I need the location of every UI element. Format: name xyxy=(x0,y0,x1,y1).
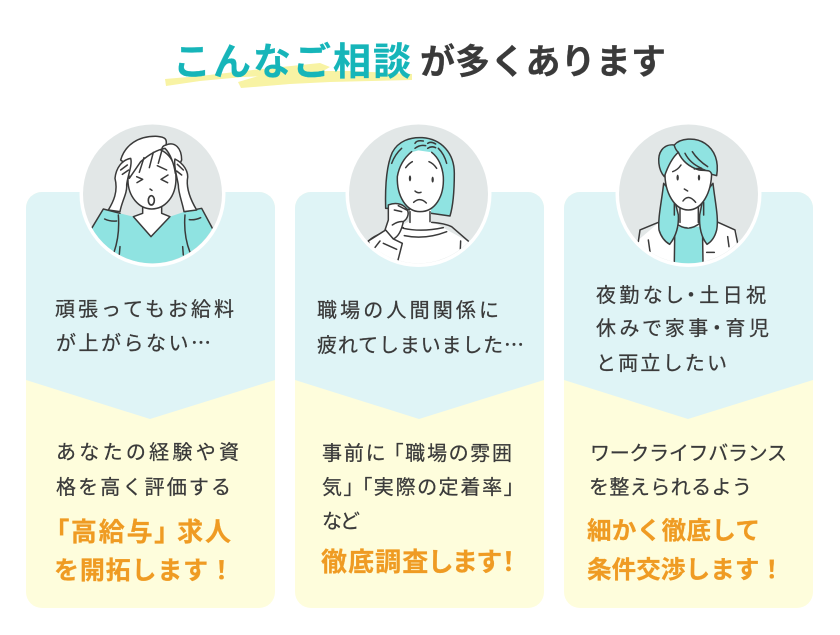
solution text 2: など xyxy=(322,505,360,534)
icon: worried woman in jacket xyxy=(616,121,762,272)
card 2 upper background xyxy=(295,192,544,419)
solution text 3: ワークライフバランス xyxy=(590,437,787,466)
title xyxy=(165,31,666,88)
title text: teal part: こんなご相談 xyxy=(173,31,411,86)
card 1 lower background xyxy=(26,192,275,608)
solution text 1: を開拓します！ xyxy=(54,551,234,587)
problem text 3: 休みで家事・育児 xyxy=(596,312,769,341)
problem text 3 xyxy=(596,279,769,376)
solution text 3: 細かく徹底して xyxy=(587,512,760,547)
card 3 lower background xyxy=(564,192,813,608)
solution text 1 xyxy=(54,436,239,587)
problem text 1: が上がらない… xyxy=(56,327,211,356)
panel: card 2 xyxy=(295,121,544,608)
panel: card 3 xyxy=(564,121,813,608)
panel: card 1 xyxy=(26,121,275,608)
card 3 upper background xyxy=(564,192,813,419)
solution text 3: 条件交渉します！ xyxy=(587,551,784,586)
solution text 1: あなたの経験や資 xyxy=(56,436,239,465)
solution text 3 xyxy=(587,437,787,586)
problem text 1: 頑張ってもお給料 xyxy=(55,293,234,322)
solution text 2: 気」 「実際の定着率」 xyxy=(322,471,514,500)
title text: dark part: が多くあります xyxy=(420,34,666,85)
solution text 3: を整えられるよう xyxy=(589,471,752,500)
solution text 2: 事前に 「職場の雰囲 xyxy=(322,437,512,466)
card 1 upper background xyxy=(26,192,275,419)
solution text 2: 徹底調査します！ xyxy=(321,542,515,579)
problem text 2: 疲れてしまいました… xyxy=(317,329,524,358)
problem text 2 xyxy=(317,294,524,358)
problem text 2: 職場の人間関係に xyxy=(317,294,499,323)
icon: stressed person holding head xyxy=(80,121,226,272)
solution text 1: 格を高く評価する xyxy=(56,471,231,500)
solution text 2 xyxy=(321,437,515,579)
title highlight brush xyxy=(165,63,412,88)
card 2 lower background xyxy=(295,192,544,608)
problem text 1 xyxy=(55,293,234,356)
solution text 1: 「高給与」 求人 xyxy=(56,512,231,549)
problem text 3: 夜勤なし・土日祝 xyxy=(596,279,766,308)
problem text 3: と両立したい xyxy=(596,347,727,376)
icon: worried person touching chin xyxy=(346,121,492,272)
